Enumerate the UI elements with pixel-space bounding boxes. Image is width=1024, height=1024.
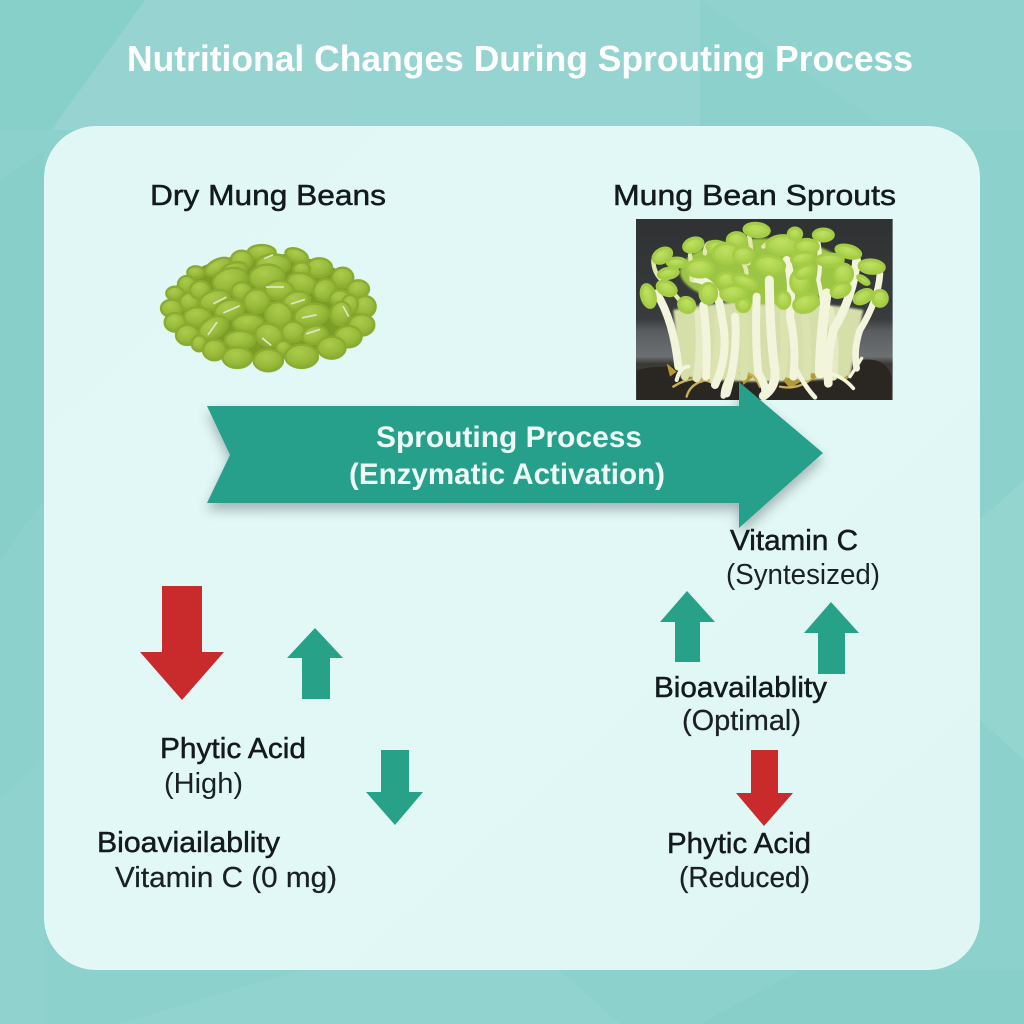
icon: large red down arrow (140, 586, 224, 700)
arrow: sprouting process (207, 382, 823, 528)
arrow label: enzymatic activation: (Enzymatic Activation) (349, 458, 665, 491)
icon: green up arrow right two (804, 602, 859, 674)
text: bioavailability and vitamin C before (97, 827, 337, 894)
canopy mass (680, 238, 847, 305)
stem mass (673, 302, 863, 382)
text: phytic acid reduced: Phytic Acid (667, 828, 811, 860)
photo: mung bean sprouts (636, 219, 893, 400)
heading: mung bean sprouts: Mung Bean Sprouts (613, 180, 896, 212)
text: vitamin C synthesized: (Syntesized) (726, 559, 880, 591)
arrow label: sprouting process: Sprouting Process (376, 421, 642, 454)
text: bioavailability optimal (654, 672, 828, 737)
text: phytic acid high (160, 733, 306, 800)
text: bioavailability optimal: Bioavailablity (654, 672, 828, 704)
icon: green up arrow right one (660, 591, 715, 662)
icon: red down arrow right (736, 750, 793, 826)
text: phytic acid high: (High) (164, 768, 243, 800)
text: phytic acid reduced (667, 828, 811, 894)
text: bioavailability and vitamin C before: Bioaviailablity (97, 827, 281, 859)
icon: green up arrow left (287, 628, 343, 699)
icon: green down arrow left (366, 750, 423, 825)
stems (683, 310, 845, 380)
text: phytic acid high: Phytic Acid (160, 733, 306, 765)
panel: main content card (44, 126, 980, 970)
heading: dry mung beans: Dry Mung Beans (150, 180, 386, 212)
soil (637, 359, 892, 400)
text: phytic acid reduced: (Reduced) (679, 862, 810, 894)
text: bioavailability optimal: (Optimal) (682, 705, 801, 737)
text: vitamin C synthesized: Vitamin C (730, 525, 858, 557)
title: Nutritional Changes During Sprouting Process (127, 38, 913, 79)
text: bioavailability and vitamin C before: Vitamin C (0 mg) (115, 862, 337, 894)
illustration: pile of dry mung beans (161, 245, 376, 371)
text: vitamin C synthesized (726, 525, 880, 591)
leaves (639, 222, 887, 316)
